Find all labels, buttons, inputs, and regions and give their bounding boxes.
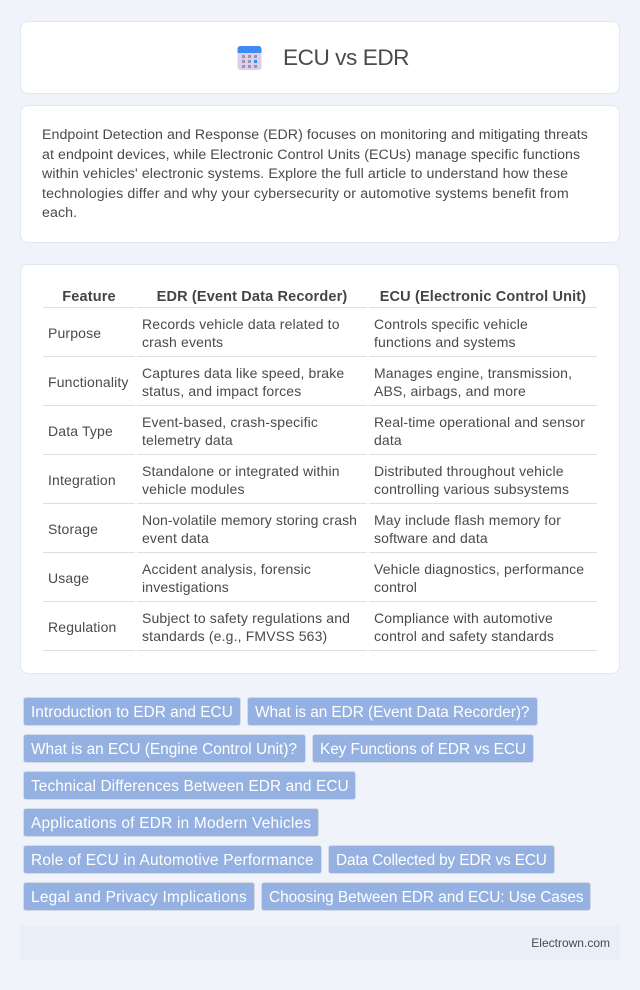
row: Usage: Accident analysis, forensic xyxy=(142,561,311,577)
row: Usage: Usage xyxy=(48,570,89,586)
row: Usage: Vehicle diagnostics, performance xyxy=(374,561,584,577)
row: Storage xyxy=(43,512,597,553)
row: Functionality: ABS, airbags, and more xyxy=(374,383,526,399)
row: Integration: vehicle modules xyxy=(142,481,245,497)
comparison table xyxy=(43,289,597,651)
tag: Applications of EDR in Modern Vehicles xyxy=(31,815,311,832)
table header: EDR (Event Data Recorder) xyxy=(157,289,347,305)
row: Data Type: Data Type xyxy=(48,423,113,439)
tag xyxy=(328,845,555,874)
row: Data Type xyxy=(43,414,597,455)
row: Storage: Storage xyxy=(48,521,98,537)
footer credit: Electrown.com xyxy=(531,936,610,950)
topic tags xyxy=(23,697,591,911)
table header: ECU (Electronic Control Unit) xyxy=(380,289,586,305)
row: Integration: controlling various subsystems xyxy=(374,481,569,497)
row: Storage: Non-volatile memory storing crash xyxy=(142,512,357,528)
row: Data Type: Event-based, crash-specific xyxy=(142,414,318,430)
row: Regulation xyxy=(43,610,597,651)
intro text: technologies differ and why your cybersecurity or automotive systems benefit from xyxy=(42,186,569,202)
header panel xyxy=(20,21,620,94)
row: Integration xyxy=(43,463,597,504)
row: Functionality: Manages engine, transmission, xyxy=(374,365,572,381)
row: Functionality: Functionality xyxy=(48,374,129,390)
intro panel xyxy=(20,105,620,243)
row: Data Type: telemetry data xyxy=(142,432,233,448)
intro text: each. xyxy=(42,205,77,221)
tag xyxy=(23,697,241,726)
row: Purpose: Purpose xyxy=(48,325,101,341)
tag: What is an ECU (Engine Control Unit)? xyxy=(31,741,297,758)
intro text xyxy=(42,127,588,221)
icon: calendar xyxy=(238,46,262,70)
tag xyxy=(23,771,356,800)
row: Storage: software and data xyxy=(374,530,488,546)
tag: Legal and Privacy Implications xyxy=(31,889,247,906)
tag xyxy=(312,734,534,763)
tag xyxy=(23,734,306,763)
title: ECU vs EDR xyxy=(283,45,409,70)
tag: Introduction to EDR and ECU xyxy=(31,704,233,721)
row: Regulation: Compliance with automotive xyxy=(374,610,553,626)
intro text: within vehicles' electronic systems. Explore the full article to understand how these xyxy=(42,166,568,182)
row: Regulation: Regulation xyxy=(48,619,116,635)
row: Purpose: functions and systems xyxy=(374,334,516,350)
row: Storage: event data xyxy=(142,530,209,546)
row: Data Type: Real-time operational and sensor xyxy=(374,414,585,430)
row: Functionality xyxy=(43,365,597,406)
tag xyxy=(23,882,255,911)
tag xyxy=(247,697,538,726)
tag: Technical Differences Between EDR and ECU xyxy=(31,778,349,795)
tag xyxy=(261,882,591,911)
tag xyxy=(23,845,322,874)
row: Data Type: data xyxy=(374,432,402,448)
tag: Choosing Between EDR and ECU: Use Cases xyxy=(269,889,584,906)
row: Integration: Standalone or integrated within xyxy=(142,463,340,479)
intro text: at endpoint devices, while Electronic Control Units (ECUs) manage specific functions xyxy=(42,146,580,162)
row: Functionality: Captures data like speed, brake xyxy=(142,365,344,381)
row: Functionality: status, and impact forces xyxy=(142,383,301,399)
table header: Feature xyxy=(62,289,116,305)
row: Purpose: Controls specific vehicle xyxy=(374,316,528,332)
row: Regulation: standards (e.g., FMVSS 563) xyxy=(142,628,327,644)
table header xyxy=(43,289,597,308)
row: Regulation: Subject to safety regulations and xyxy=(142,610,350,626)
row: Usage: control xyxy=(374,579,417,595)
table panel xyxy=(20,264,620,674)
tag xyxy=(23,808,319,837)
row: Integration: Distributed throughout vehicle xyxy=(374,463,564,479)
row: Usage: investigations xyxy=(142,579,229,595)
row: Regulation: control and safety standards xyxy=(374,628,554,644)
row: Integration: Integration xyxy=(48,472,116,488)
row: Usage xyxy=(43,561,597,602)
row: Purpose: Records vehicle data related to xyxy=(142,316,340,332)
row: Storage: May include flash memory for xyxy=(374,512,561,528)
row: Purpose xyxy=(43,316,597,357)
footer xyxy=(20,926,620,960)
row: Purpose: crash events xyxy=(142,334,223,350)
tag: What is an EDR (Event Data Recorder)? xyxy=(255,704,529,721)
tag: Role of ECU in Automotive Performance xyxy=(31,852,314,869)
tag: Key Functions of EDR vs ECU xyxy=(320,741,526,758)
intro text: Endpoint Detection and Response (EDR) focuses on monitoring and mitigating threats xyxy=(42,127,588,143)
tag: Data Collected by EDR vs ECU xyxy=(336,852,547,869)
